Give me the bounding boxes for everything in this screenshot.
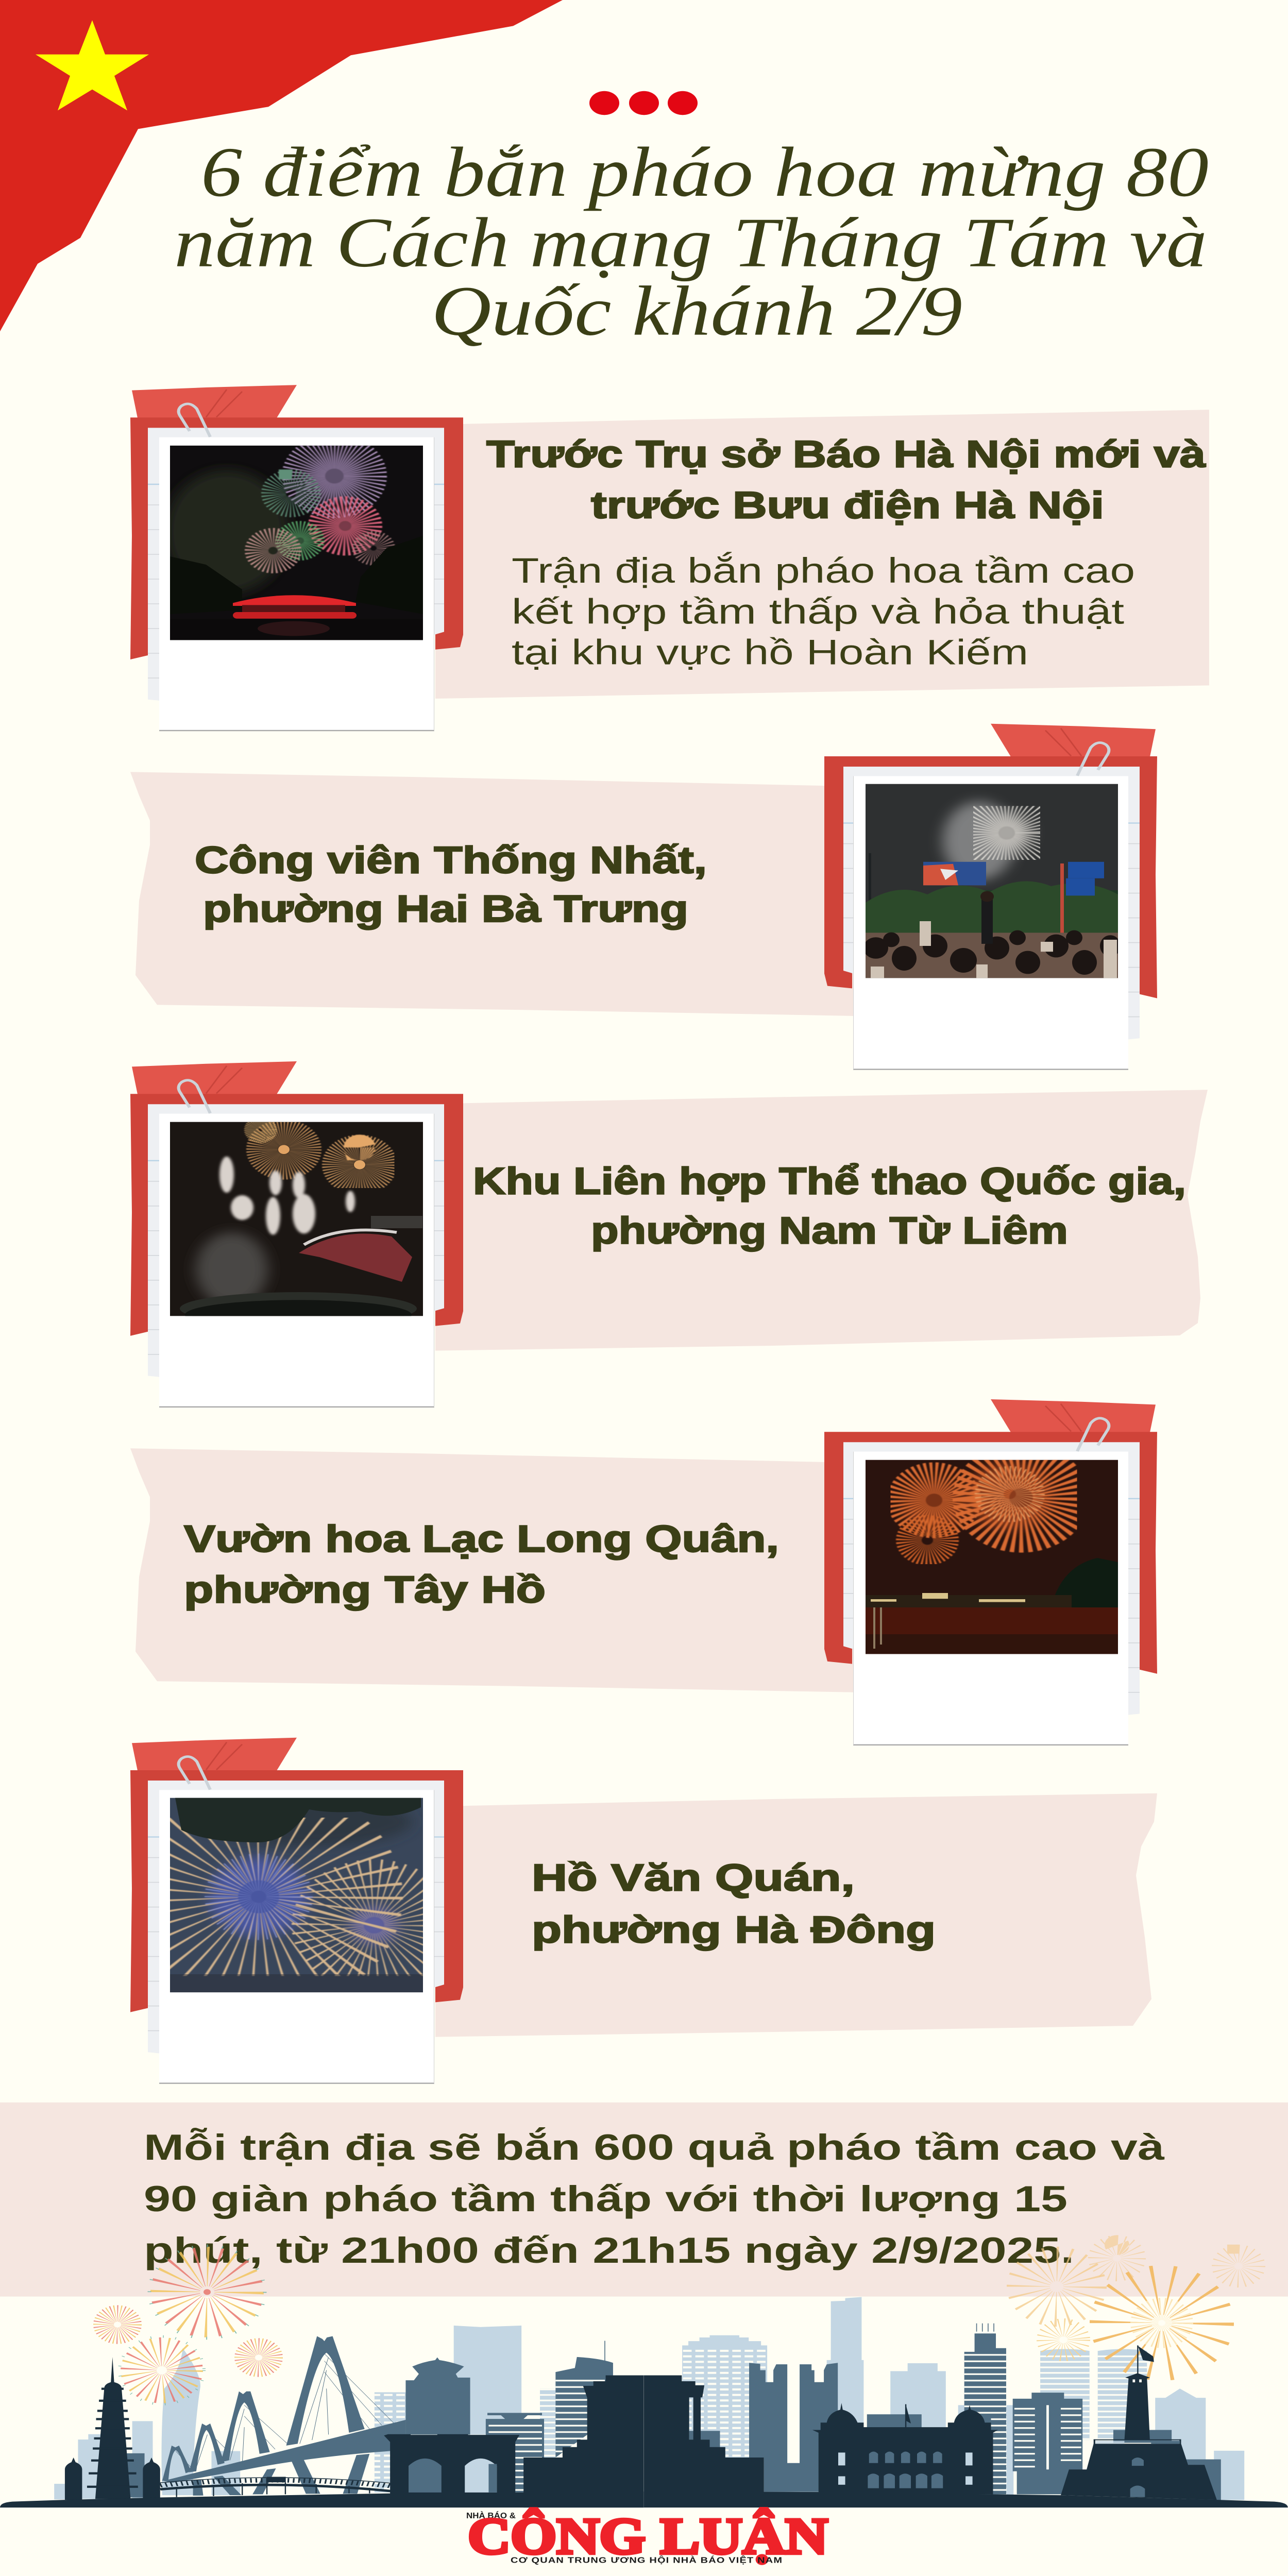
heading 2: phường Hai Bà Trưng — [203, 888, 688, 930]
photo: crowd watching fireworks — [863, 784, 1121, 978]
panel: location 1 — [130, 385, 1209, 731]
title — [174, 132, 1209, 350]
heading 3: phường Nam Từ Liêm — [591, 1209, 1068, 1252]
heading 2 — [195, 839, 707, 930]
central monument — [523, 2376, 644, 2507]
pagoda — [65, 2357, 160, 2500]
skyline: landmarks foreground — [0, 2345, 1288, 2507]
heading 3: Khu Liên hợp Thể thao Quốc gia, — [473, 1160, 1186, 1202]
photo frame 2 — [824, 724, 1157, 1070]
photo: blue fireworks — [170, 1797, 423, 1992]
torn paper 2 — [130, 772, 855, 1016]
description 1: tại khu vực hồ Hoàn Kiếm — [512, 633, 1028, 672]
logo: Nhà Báo & Công Luận: NHÀ BÁO & — [466, 2511, 516, 2520]
flag corner — [0, 0, 563, 331]
heading 1: Trước Trụ sở Báo Hà Nội mới và — [486, 433, 1206, 475]
summary text: 90 giàn pháo tầm thấp với thời lượng 15 — [144, 2178, 1067, 2219]
arch monument — [384, 2434, 519, 2494]
heading 3 — [473, 1160, 1186, 1252]
heading 5: Hồ Văn Quán, — [532, 1856, 855, 1899]
panel: location 5 — [130, 1738, 1157, 2084]
photo: fireworks over Hoan Kiem lake — [866, 1460, 1118, 1654]
heading 1: trước Bưu điện Hà Nội — [591, 484, 1104, 527]
star — [36, 20, 149, 110]
skyline: far buildings — [54, 2297, 1244, 2500]
iron bridge — [160, 2478, 392, 2497]
ground right — [644, 2492, 1288, 2507]
heading 2: Công viên Thống Nhất, — [195, 839, 707, 881]
opera house — [812, 2403, 998, 2494]
ground — [0, 2492, 644, 2507]
summary text: Mỗi trận địa sẽ bắn 600 quả pháo tầm cao và — [144, 2127, 1165, 2167]
logo: Nhà Báo & Công Luận: CÔNG LUẬN — [468, 2509, 828, 2565]
heading 4 — [184, 1518, 779, 1611]
three red dots — [589, 91, 698, 115]
panel: location 3 — [130, 1061, 1208, 1408]
torn paper 1 — [435, 410, 1209, 699]
panel: summary band — [0, 2103, 1288, 2297]
torn paper 4 — [130, 1448, 855, 1692]
summary text: phút, từ 21h00 đến 21h15 ngày 2/9/2025. — [144, 2230, 1074, 2270]
title: năm Cách mạng Tháng Tám và — [174, 203, 1207, 282]
heading 1 — [486, 433, 1206, 527]
skyline: mid buildings and bridge — [126, 2324, 1221, 2500]
logo: Nhà Báo & Công Luận: CƠ QUAN TRUNG ƯƠNG HỘI NHÀ BÁO VIỆT NAM — [511, 2555, 782, 2565]
title: 6 điểm bắn pháo hoa mừng 80 — [201, 132, 1209, 211]
photo: fireworks over The Huc bridge — [165, 446, 423, 640]
title: Quốc khánh 2/9 — [431, 272, 962, 350]
summary text — [144, 2127, 1165, 2270]
panel: location 4 — [130, 1399, 1157, 1745]
fireworks right — [1028, 2245, 1254, 2356]
torn paper 3 — [435, 1090, 1208, 1351]
photo frame 1 — [130, 385, 463, 731]
national monument right — [644, 2376, 819, 2494]
photo frame 4 — [824, 1399, 1157, 1745]
photo frame 3 — [130, 1061, 463, 1408]
heading 5 — [532, 1856, 936, 1951]
description 1 — [512, 551, 1135, 672]
heading 4: phường Tây Hồ — [184, 1568, 546, 1611]
photo: fireworks over the national stadium — [170, 1122, 423, 1330]
description 1: Trận địa bắn pháo hoa tầm cao — [512, 551, 1135, 590]
fireworks left — [104, 2246, 273, 2404]
description 1: kết hợp tầm thấp và hỏa thuật — [512, 592, 1124, 631]
heading 4: Vườn hoa Lạc Long Quân, — [184, 1518, 779, 1560]
panel: location 2 — [130, 724, 1157, 1070]
flag tower — [1061, 2345, 1217, 2500]
photo frame 5 — [130, 1738, 463, 2084]
torn paper 5 — [435, 1793, 1157, 2037]
heading 5: phường Hà Đông — [532, 1908, 936, 1951]
